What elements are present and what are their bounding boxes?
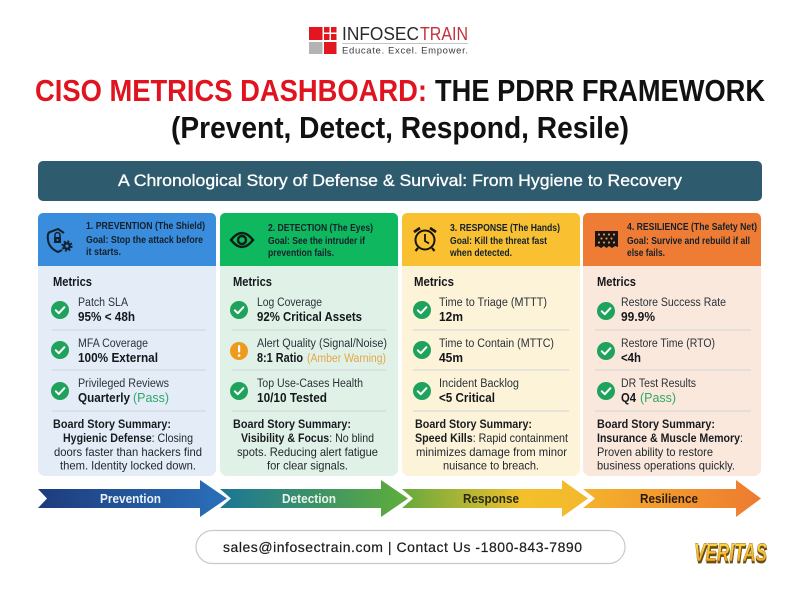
logo: InfosecTrain: TRAIN [420, 23, 468, 44]
icon: eye [231, 233, 253, 247]
metric: log coverage: 92% Critical Assets [257, 309, 362, 324]
metric: MFA coverage: MFA Coverage [78, 338, 148, 350]
logo: InfosecTrain: INFOSEC [342, 23, 419, 44]
metric: patch SLA [51, 297, 135, 324]
logo: Veritas: VERITAS [695, 541, 767, 569]
metric: alert quality: (Amber Warning) [307, 353, 386, 365]
panel: resilience [583, 213, 761, 476]
board story summary: resilience: Insurance & Muscle Memory: [597, 431, 743, 445]
panel header: response: Goal: Kill the threat fast [450, 236, 548, 247]
metrics heading: Metrics [597, 275, 636, 289]
panel header: detection: 2. DETECTION (The Eyes) [268, 223, 373, 234]
panel header: prevention [38, 213, 216, 266]
arrow: resilience: Resilience [640, 492, 698, 506]
icon: alarm clock [414, 228, 436, 251]
title: CISO METRICS DASHBOARD: [35, 73, 427, 108]
arrow: prevention: Prevention [100, 492, 161, 506]
metric: top use-cases health: Top Use-Cases Health [257, 378, 363, 390]
panel header: detection: prevention fails. [268, 248, 334, 259]
board story summary: detection: Visibility & Focus: No blind [241, 431, 374, 445]
metric: restore success rate: Restore Success Rate [621, 297, 726, 309]
arrow: resilience [583, 480, 761, 517]
board story summary: detection: for clear signals. [267, 458, 348, 472]
metric: privileged reviews: Privileged Reviews [78, 378, 169, 390]
metric: DR test results: Q4 [621, 390, 637, 405]
title: THE PDRR FRAMEWORK [435, 73, 766, 108]
metric: top use-cases health: 10/10 Tested [257, 390, 327, 405]
metric: DR test results: DR Test Results [621, 378, 696, 390]
board story summary: resilience: Board Story Summary: [597, 417, 715, 431]
board story summary: prevention: Board Story Summary: [53, 417, 171, 431]
metric: privileged reviews: Quarterly [78, 390, 131, 405]
panel header: detection [220, 213, 398, 266]
panel header: prevention: Goal: Stop the attack before [86, 235, 203, 246]
panel header: response: 3. RESPONSE (The Hands) [450, 223, 560, 234]
arrow: detection: Detection [282, 492, 336, 506]
metric: incident backlog: <5 Critical [439, 390, 495, 405]
arrow: prevention [38, 480, 227, 517]
metrics heading: Metrics [53, 275, 92, 289]
panel: response [402, 213, 580, 476]
metric: patch SLA: Patch SLA [78, 297, 128, 309]
board story summary: prevention: them. Identity locked down. [60, 458, 196, 472]
metric: log coverage: Log Coverage [257, 297, 322, 309]
arrow: detection [220, 480, 408, 517]
board story summary: detection: spots. Reducing alert fatigue [237, 445, 378, 459]
metric: MFA coverage [51, 338, 158, 365]
logo: InfosecTrain [309, 23, 468, 56]
metric: log coverage [230, 297, 362, 324]
metric: time to contain: Time to Contain (MTTC) [439, 338, 554, 350]
title: (Prevent, Detect, Respond, Resile) [171, 110, 629, 145]
metric: incident backlog: Incident Backlog [439, 378, 519, 390]
board story summary: resilience: business operations quickly. [597, 458, 735, 472]
panel header: resilience: else fails. [627, 248, 665, 259]
contact pill: sales@infosectrain.com | Contact Us -1800-843-7890 [223, 539, 582, 555]
board story summary: resilience: Proven ability to restore [597, 445, 713, 459]
board story summary: response: Speed Kills: Rapid containment [415, 431, 569, 445]
contact pill [196, 530, 625, 564]
board story summary: response: Board Story Summary: [415, 417, 532, 431]
metric: DR test results: (Pass) [640, 390, 676, 405]
board story summary: response: nuisance to breach. [443, 458, 539, 472]
title [35, 73, 766, 145]
metric: privileged reviews: (Pass) [133, 390, 169, 405]
board story summary: prevention: doors faster than hackers find [54, 445, 202, 459]
metric: patch SLA: 95% < 48h [78, 309, 135, 324]
panel header: prevention: 1. PREVENTION (The Shield) [86, 221, 205, 232]
metric: alert quality: Alert Quality (Signal/Noise) [257, 338, 387, 350]
panel header: resilience: Goal: Survive and rebuild if all [627, 236, 750, 247]
metric: restore time [597, 338, 715, 365]
logo: Veritas: VERITAS [694, 539, 767, 567]
metric: restore success rate [597, 297, 726, 324]
board story summary: prevention [53, 417, 202, 472]
metric: alert quality: 8:1 Ratio [257, 350, 303, 365]
metrics heading: Metrics [414, 275, 454, 289]
banner: A Chronological Story of Defense & Survival: From Hygiene to Recovery [118, 171, 683, 190]
logo: Veritas [694, 539, 767, 569]
board story summary: prevention: Hygienic Defense: Closing [63, 431, 193, 445]
metric: alert quality [230, 338, 387, 365]
banner [38, 161, 762, 201]
panel: prevention [38, 213, 216, 476]
metric: restore success rate: 99.9% [621, 309, 655, 324]
panel header: resilience: 4. RESILIENCE (The Safety Net) [627, 222, 757, 233]
panel header: detection: Goal: See the intruder if [268, 236, 366, 247]
board story summary: detection [233, 417, 378, 472]
board story summary: response: minimizes damage from minor [416, 445, 567, 459]
metric: time to triage: Time to Triage (MTTT) [439, 297, 547, 309]
panel header: resilience [583, 213, 761, 266]
metric: time to contain: 45m [439, 350, 463, 365]
icon: shield with lock and gear [48, 229, 72, 252]
arrow: response: Response [463, 492, 519, 506]
panel header: response [402, 213, 580, 266]
metric: privileged reviews [51, 378, 169, 405]
metric: top use-cases health [230, 378, 363, 405]
board story summary: detection: Board Story Summary: [233, 417, 351, 431]
panel header: prevention: it starts. [86, 247, 121, 258]
board story summary: response [415, 417, 569, 472]
arrow: response [402, 480, 588, 517]
panel: detection [220, 213, 398, 476]
metric: restore time: <4h [621, 350, 641, 365]
panel header: response: when detected. [449, 248, 512, 259]
board story summary: resilience [597, 417, 743, 472]
metric: time to contain [413, 338, 554, 365]
metric: restore time: Restore Time (RTO) [621, 338, 715, 350]
logo: InfosecTrain: Educate. Excel. Empower. [342, 46, 468, 56]
metric: incident backlog [413, 378, 519, 405]
metrics heading: Metrics [233, 275, 272, 289]
metric: MFA coverage: 100% External [78, 350, 158, 365]
icon: safety net [595, 231, 618, 248]
metric: time to triage [413, 297, 547, 324]
metric: DR test results [597, 378, 696, 405]
metric: time to triage: 12m [439, 309, 463, 324]
